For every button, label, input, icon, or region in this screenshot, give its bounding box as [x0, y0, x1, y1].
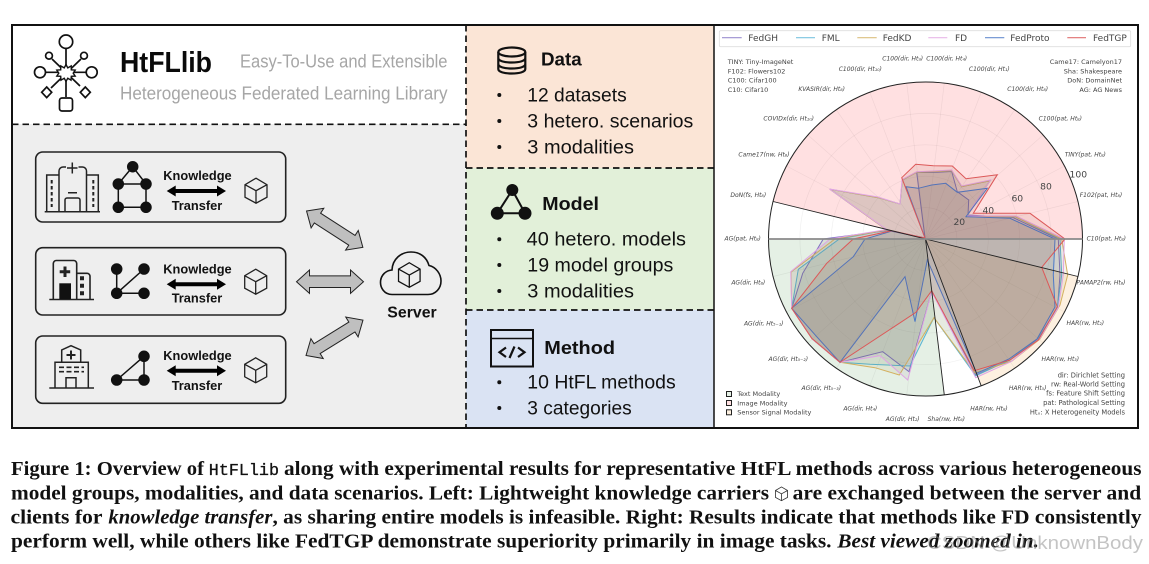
axis labels: AG(dir, Ht₄) [842, 406, 877, 413]
icon: model graph 3 [112, 351, 149, 385]
axis labels: HAR(rw, Ht₈) [970, 406, 1008, 413]
axis labels: C100(dir, Ht₁₀) [839, 66, 882, 73]
axis labels: Sha(nw, Ht₆) [928, 416, 965, 423]
figure caption: , as sharing entire models is infeasible. Right: Results indicate that methods like FD consistently [272, 507, 1142, 528]
list: model facts: 19 model groups [527, 256, 673, 277]
label: server: Server [387, 304, 437, 321]
series: FML [792, 171, 1062, 376]
heading: data: Data [541, 49, 582, 70]
chart legend: FedTGP [1093, 34, 1127, 44]
note: dataset abbreviations left: F102: Flowers102 [728, 67, 785, 75]
chart legend: FedKD [883, 34, 912, 44]
radial tick labels [953, 169, 1087, 228]
axis labels: Came17(nw, Ht₈) [738, 151, 790, 158]
axis labels [724, 55, 1126, 423]
modality legend: Sensor Signal Modality [737, 408, 812, 416]
modality legend [726, 390, 812, 416]
list: data facts: 12 datasets [527, 86, 627, 107]
arrow: client 3 to server [300, 310, 369, 365]
axis labels: C100(dir, Ht₈) [1007, 86, 1048, 93]
label: knowledge transfer [163, 168, 232, 213]
figure caption: clients for [10, 507, 103, 528]
axis labels: HAR(rw, Ht₃) [1042, 356, 1079, 363]
axis labels: HAR(rw, Ht₂) [1067, 320, 1104, 327]
icon: triangle graph [492, 185, 530, 219]
setting notes: pat: Pathological Setting [1043, 399, 1125, 407]
axis labels: DoN(fs, Ht₈) [730, 192, 766, 199]
chart legend [719, 31, 1131, 47]
figure caption: knowledge transfer [108, 507, 273, 528]
radar frame [768, 82, 1082, 396]
setting notes: dir: Dirichlet Setting [1058, 371, 1125, 379]
icon: federated network logo [34, 35, 97, 111]
label: knowledge transfer [163, 261, 232, 306]
icon: knowledge carrier cube [245, 178, 267, 203]
arrow: client 1 to server [300, 201, 369, 257]
setting notes: Htₓ: X Heterogeneity Models [1030, 408, 1126, 416]
icon: knowledge carrier cube [245, 269, 267, 294]
axis labels: AG(dir, Ht₅₋₁) [743, 320, 783, 327]
icon: code window [491, 330, 533, 366]
arrow: client 2 to server [296, 270, 364, 293]
modality legend: Image Modality [737, 399, 788, 407]
list: model facts: 40 hetero. models [527, 230, 686, 251]
radial tick labels: 20 [953, 217, 965, 228]
icon: clinic building [49, 260, 94, 300]
note: dataset abbreviations right: Sha: Shakespeare [1064, 67, 1122, 75]
icon: model graph 1 [113, 162, 151, 212]
axis labels: C100(dir, Ht₄) [926, 55, 967, 62]
note: dataset abbreviations left: TINY: Tiny-ImageNet [727, 58, 794, 66]
axis labels: AG(dir, Ht₈) [730, 279, 765, 286]
icon: knowledge carrier cube [245, 358, 267, 383]
panel: library header [12, 25, 466, 124]
axis labels: C100(pat, Ht₈) [1039, 115, 1082, 122]
radial tick labels: 60 [1011, 193, 1023, 204]
label: knowledge transfer: Transfer [172, 291, 222, 306]
panel: data [466, 25, 714, 168]
list: method facts [497, 372, 676, 420]
client 3 [36, 336, 286, 403]
label: knowledge transfer: Knowledge [163, 168, 232, 183]
setting notes: rw: Real-World Setting [1051, 380, 1125, 388]
chart legend: FedGH [748, 34, 778, 44]
setting notes [1030, 371, 1126, 416]
label: knowledge transfer: Knowledge [163, 348, 232, 363]
series: FD [791, 170, 1064, 380]
list: data facts [497, 86, 693, 158]
setting notes: fs: Feature Shift Setting [1046, 390, 1125, 398]
chart legend: FD [955, 34, 967, 44]
watermark: CSDN @UnknownBody [927, 533, 1143, 553]
axis labels: C10(pat, Ht₈) [1087, 236, 1126, 243]
panel: clients and server [12, 124, 466, 428]
axis labels: C100(dir, Ht₉) [882, 55, 923, 62]
figure caption: Best viewed zoomed in. [836, 532, 1039, 552]
note: dataset abbreviations right: AG: AG News [1079, 86, 1123, 94]
axis labels: C100(dir, Ht₁) [969, 66, 1010, 73]
icon: hospital tower [45, 162, 100, 212]
panel: method [466, 310, 714, 428]
chart legend: FedProto [1010, 34, 1050, 44]
note: dataset abbreviations left: C100: Cifar100 [728, 77, 777, 85]
series: FedGH [792, 172, 1060, 375]
axis labels: COVIDx(dir, Ht₁₀) [763, 115, 814, 122]
figure caption: Figure 1: Overview of [11, 459, 205, 480]
list: method facts: 3 categories [527, 399, 632, 420]
icon: server cloud [380, 252, 441, 294]
figure caption: perform well, while others like FedTGP demonstrate superiority primarily in image tasks. [11, 532, 832, 552]
figure caption: HtFLlib [209, 462, 279, 481]
list: data facts: 3 modalities [527, 137, 634, 158]
list: model facts [497, 230, 686, 302]
axis labels: F102(pat, Ht₈) [1080, 192, 1122, 199]
panel: radar chart [714, 25, 1138, 428]
axis labels: HAR(rw, Ht₅) [1009, 385, 1046, 392]
label: knowledge transfer [163, 348, 232, 393]
label: knowledge transfer: Transfer [172, 378, 222, 393]
list: method facts: 10 HtFL methods [527, 372, 676, 393]
label: knowledge transfer: Transfer [172, 198, 222, 213]
axis labels: KVASIR(dir, Ht₈) [798, 86, 845, 93]
note: dataset abbreviations right: DoN: DomainNet [1067, 77, 1122, 85]
title: HtFLlib [120, 47, 212, 79]
figure caption: along with experimental results for representative HtFL methods across various heterogeneous [284, 459, 1142, 480]
figure caption: are exchanged between the server and [793, 483, 1141, 504]
client 1 [36, 152, 286, 222]
radar sectors [768, 82, 1082, 396]
axis labels: AG(dir, Ht₅₋₂) [768, 356, 808, 363]
radial tick labels: 40 [982, 205, 994, 216]
series: FedProto [792, 183, 1055, 373]
chart legend: FML [822, 34, 840, 44]
axis labels: AG(pat, Ht₈) [724, 236, 761, 243]
radial tick labels: 80 [1040, 181, 1052, 192]
list: data facts: 3 hetero. scenarios [527, 112, 693, 133]
label: knowledge transfer: Knowledge [163, 261, 232, 276]
tagline: Easy-To-Use and Extensible [240, 52, 448, 72]
outer frame [12, 25, 1138, 428]
modality legend: Text Modality [736, 390, 780, 398]
note: dataset abbreviations left: C10: Cifar10 [728, 86, 768, 94]
axis labels: AG(dir, Ht₅₋₃) [801, 385, 841, 392]
figure caption [10, 459, 1142, 552]
icon: database [498, 48, 525, 74]
subtitle: Heterogeneous Federated Learning Library [120, 83, 448, 103]
radial tick labels: 100 [1070, 169, 1087, 180]
list: model facts: 3 modalities [527, 281, 634, 302]
icon: model graph 2 [112, 264, 149, 298]
panel dividers [12, 25, 714, 428]
axis labels: AG(dir, Ht₂) [885, 416, 920, 423]
note: dataset abbreviations left [727, 58, 794, 94]
icon: hospital with gable [49, 346, 94, 388]
series: FedTGP [792, 164, 1065, 371]
axis labels: TINY(pat, Ht₈) [1065, 151, 1106, 158]
figure caption: model groups, modalities, and data scenarios. Left: Lightweight knowledge carriers [11, 483, 769, 504]
series: FedKD [791, 171, 1068, 375]
heading: method: Method [544, 337, 615, 358]
note: dataset abbreviations right [1050, 58, 1123, 94]
panel: model [466, 168, 714, 310]
axis labels: PAMAP2(rw, Ht₈) [1077, 279, 1125, 286]
client 2 [36, 248, 286, 315]
heading: model: Model [542, 193, 599, 214]
note: dataset abbreviations right: Came17: Camelyon17 [1050, 58, 1122, 66]
